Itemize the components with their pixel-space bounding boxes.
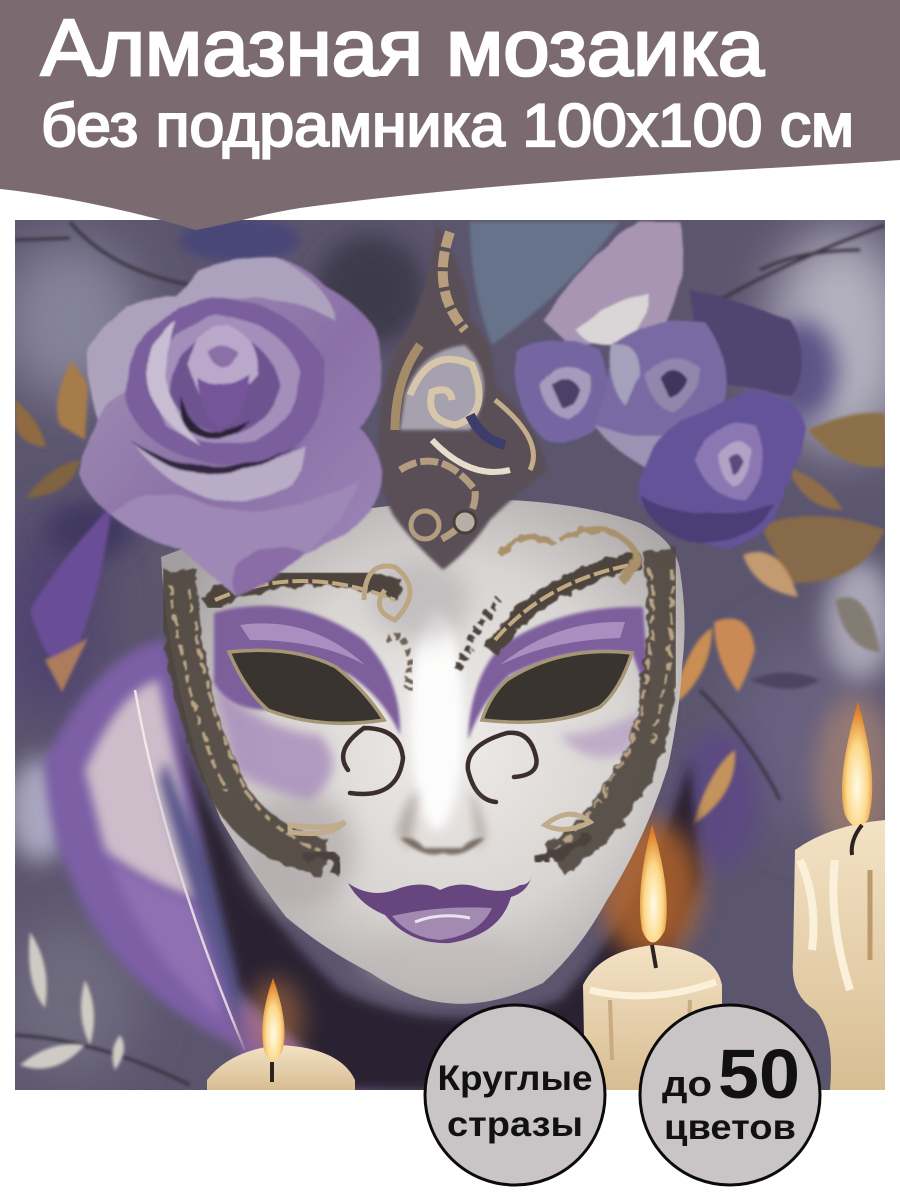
shadow highlights — [240, 622, 625, 665]
mask face — [161, 499, 685, 1004]
rose large right — [638, 390, 807, 550]
left eye opening — [229, 650, 384, 723]
lips — [348, 875, 532, 943]
eye curls — [343, 728, 537, 802]
candle bottom left — [207, 978, 355, 1090]
badge: up to 50 colours: до — [662, 1063, 712, 1104]
central gold filigree — [378, 223, 548, 570]
flame bottom left — [262, 978, 285, 1061]
left cheek wash — [214, 683, 333, 800]
title line 1: Алмазная мозаика — [41, 3, 765, 92]
badge: round rhinestones — [425, 1005, 605, 1185]
right cheek wash — [560, 710, 639, 762]
badge: round rhinestones: стразы — [447, 1105, 583, 1144]
eyeshadow right — [468, 607, 650, 740]
badge: up to 50 colours — [640, 1005, 820, 1185]
eyeshadow left — [214, 606, 400, 735]
painting background — [0, 218, 900, 1090]
branches — [15, 222, 885, 1085]
leaves — [15, 360, 885, 1070]
top banner — [0, 0, 900, 230]
rose small — [514, 340, 608, 443]
badge: up to 50 colours: 50 — [718, 1035, 800, 1113]
painting: venetian mask — [0, 218, 900, 1090]
flame right — [842, 702, 872, 826]
badge: up to 50 colours: цветов — [664, 1108, 796, 1147]
title line 2: без подрамника 100х100 см — [41, 92, 854, 159]
candle center — [583, 825, 722, 1090]
right filigree rim — [458, 530, 673, 860]
small roses cluster — [514, 222, 807, 550]
nose — [396, 790, 486, 855]
badge: round rhinestones: Круглые — [438, 1059, 592, 1098]
left filigree rim — [170, 566, 410, 875]
rose spiral petals — [125, 299, 326, 464]
right eye opening — [482, 652, 632, 722]
dark shadow around mask and candle glow — [170, 700, 700, 1090]
rose medium — [595, 321, 726, 472]
large rose — [79, 257, 383, 597]
flame center — [640, 825, 667, 942]
feathers: top blue and left purple — [45, 222, 620, 1090]
candle right — [793, 695, 895, 1090]
